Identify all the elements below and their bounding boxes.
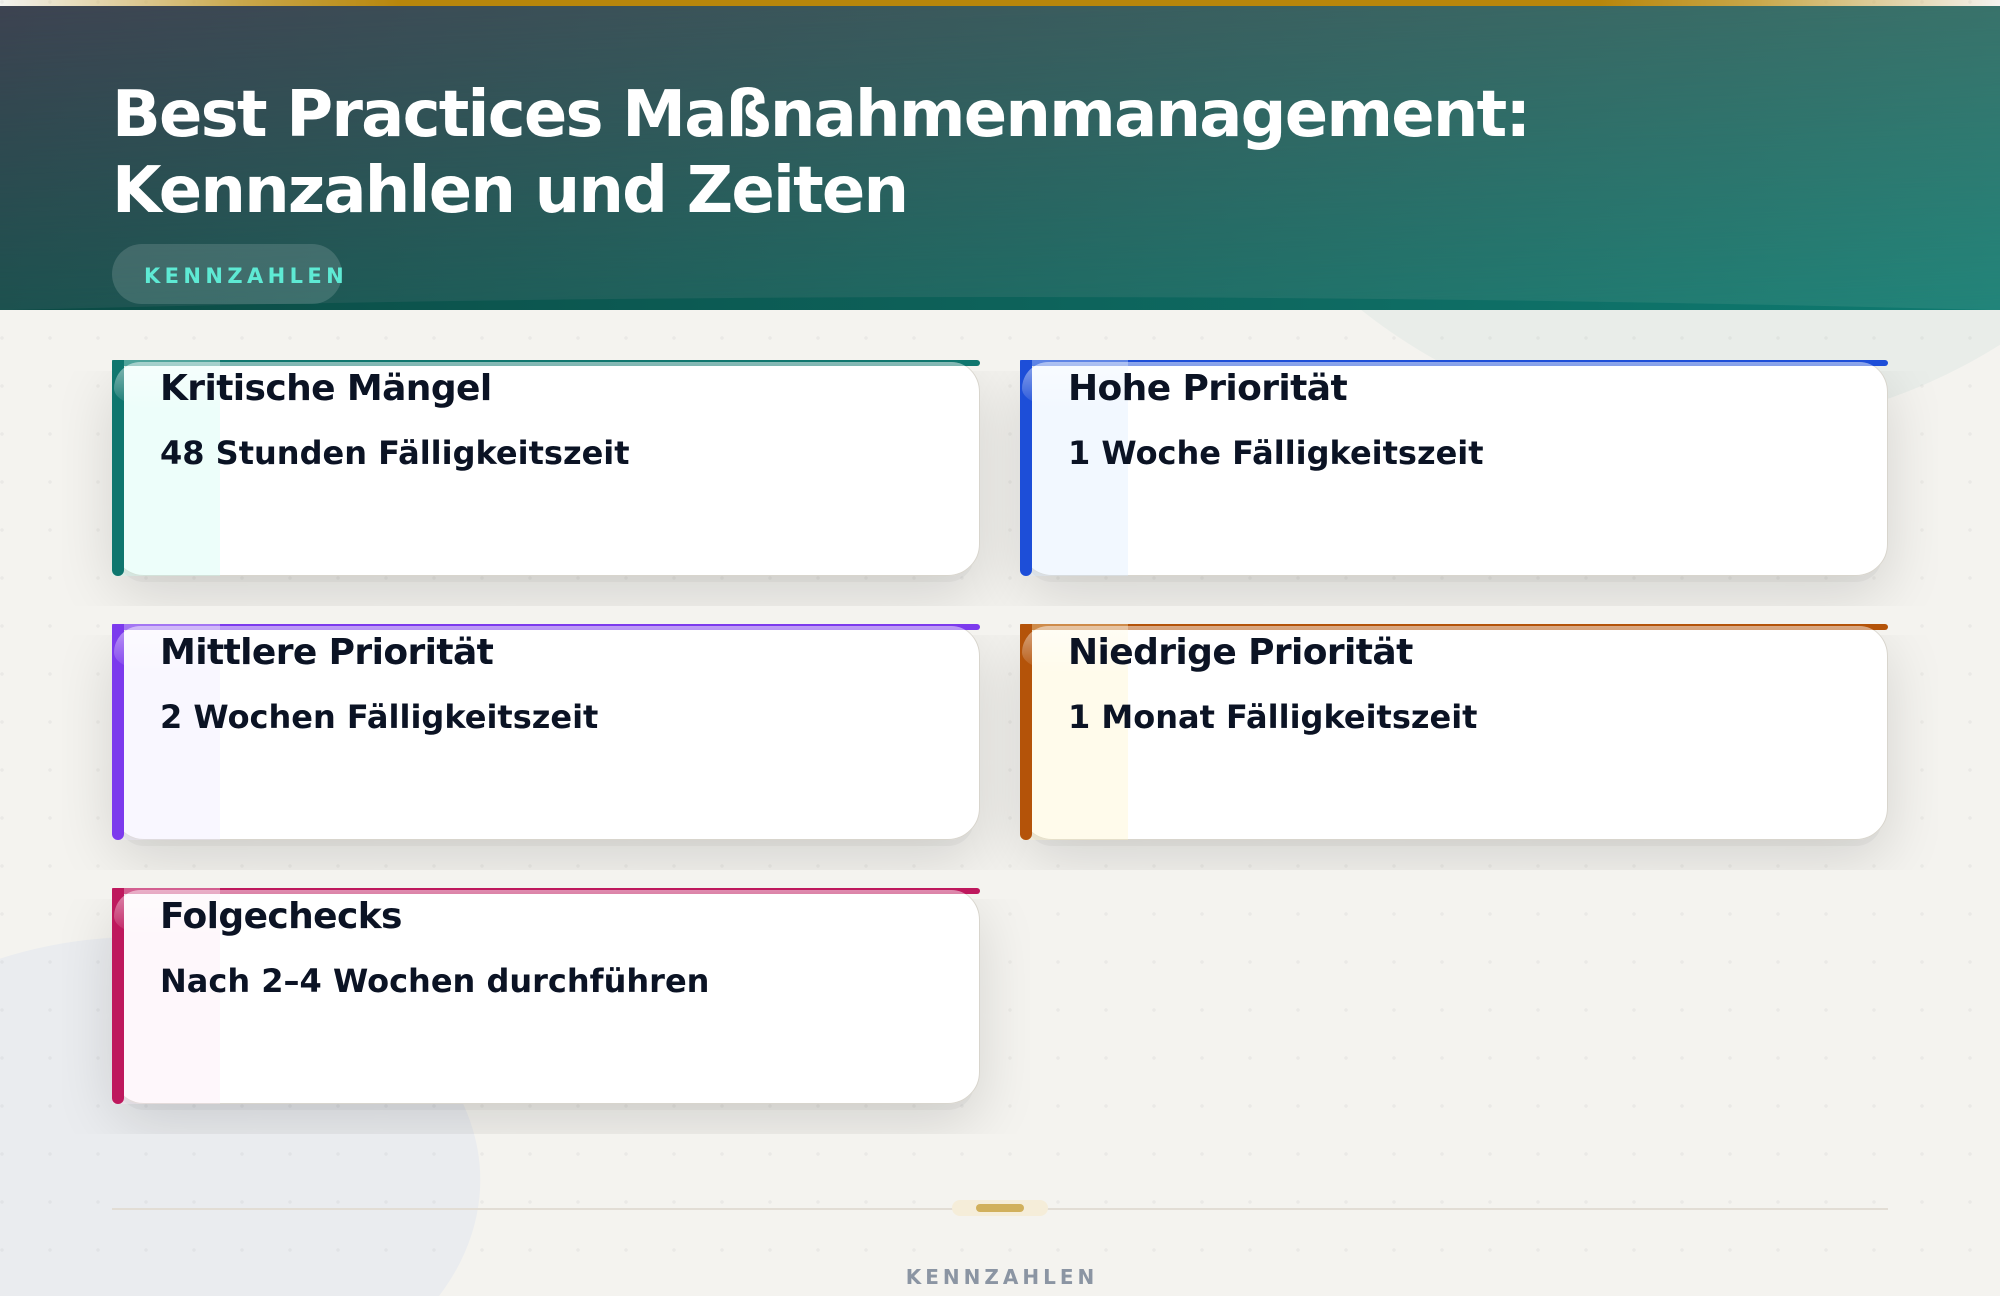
card text: 2 Wochen Fälligkeitszeit bbox=[160, 698, 598, 736]
header band bbox=[0, 6, 2000, 310]
title: Best Practices Maßnahmenmanagement: bbox=[112, 78, 1529, 152]
card: Hohe Priorität bbox=[1020, 360, 1888, 576]
card text: Nach 2–4 Wochen durchführen bbox=[160, 962, 709, 1000]
card heading: Hohe Priorität bbox=[1068, 368, 1347, 409]
title: Kennzahlen und Zeiten bbox=[112, 154, 907, 228]
tag pill bbox=[112, 244, 342, 304]
title bbox=[112, 78, 1529, 228]
card: Folgechecks bbox=[112, 888, 980, 1104]
card text: 1 Woche Fälligkeitszeit bbox=[1068, 434, 1484, 472]
tag pill: KENNZAHLEN bbox=[144, 264, 348, 288]
footer label: KENNZAHLEN bbox=[906, 1265, 1098, 1289]
top accent stripe bbox=[0, 0, 2000, 6]
card text: 1 Monat Fälligkeitszeit bbox=[1068, 698, 1477, 736]
card: Kritische Mängel bbox=[112, 360, 980, 576]
card: Niedrige Priorität bbox=[1020, 624, 1888, 840]
card heading: Niedrige Priorität bbox=[1068, 632, 1413, 673]
card: Mittlere Priorität bbox=[112, 624, 980, 840]
footer divider bbox=[112, 1200, 1888, 1216]
card text: 48 Stunden Fälligkeitszeit bbox=[160, 434, 630, 472]
card heading: Kritische Mängel bbox=[160, 368, 492, 409]
card heading: Folgechecks bbox=[160, 896, 402, 937]
card heading: Mittlere Priorität bbox=[160, 632, 493, 673]
